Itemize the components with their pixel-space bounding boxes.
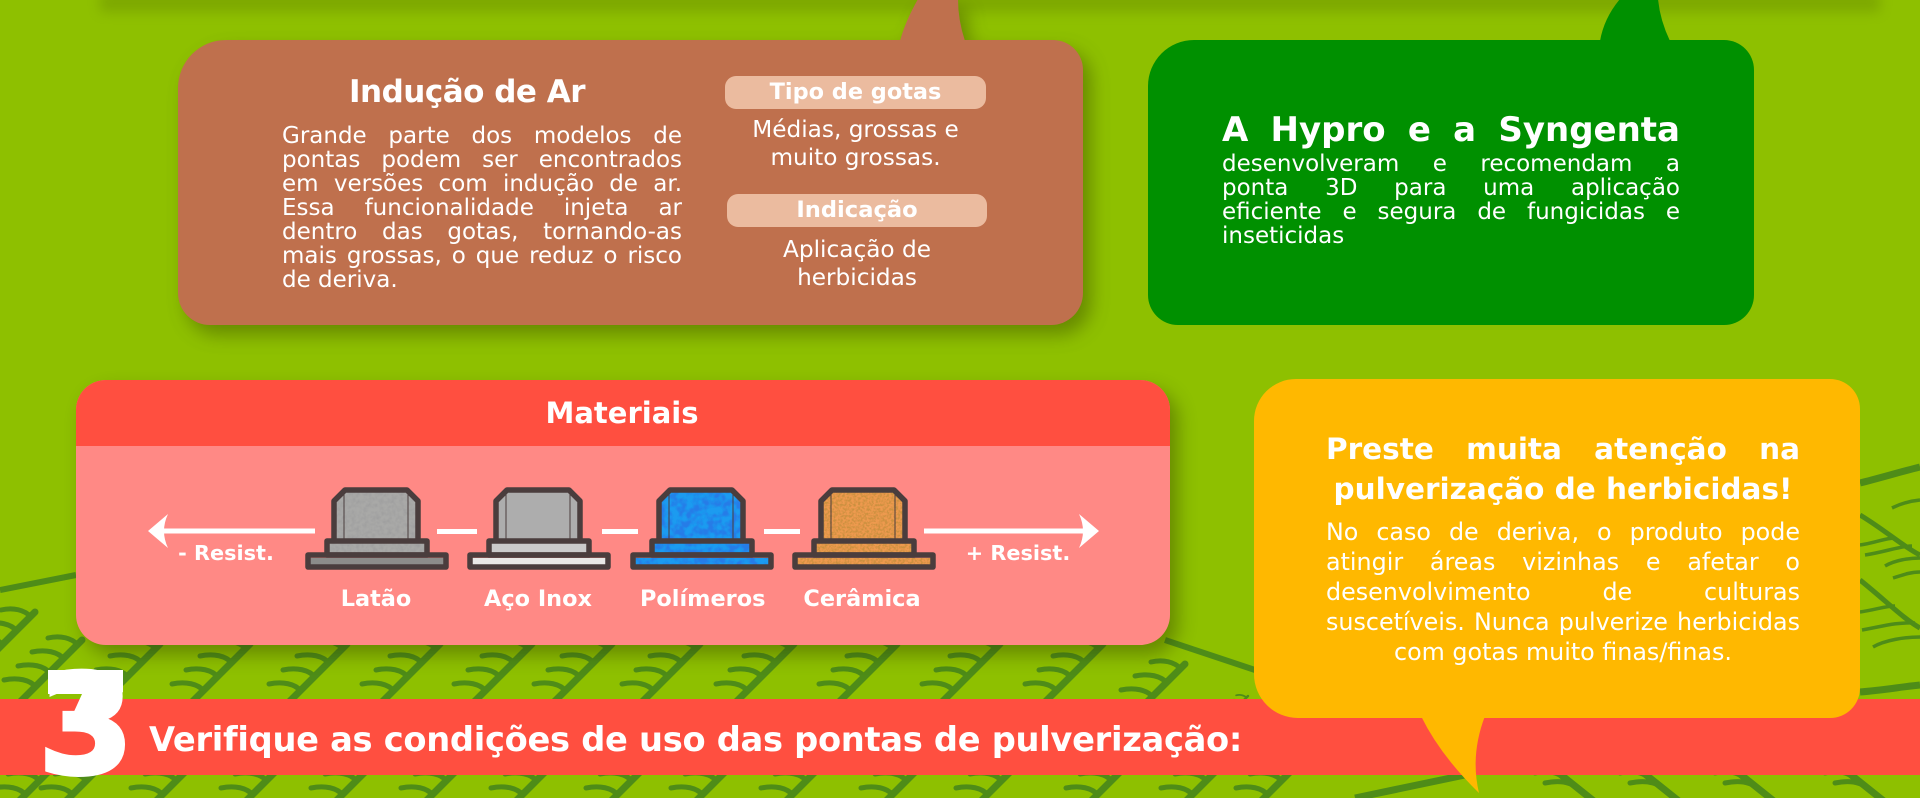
body text: Essa funcionalidade injeta ar bbox=[282, 195, 682, 221]
body text: com gotas muito finas/finas. bbox=[1394, 638, 1732, 666]
green bubble body bbox=[1148, 40, 1754, 325]
heading: pulverização de herbicidas! bbox=[1334, 472, 1792, 506]
panel: hypro e syngenta bbox=[1148, 0, 1754, 325]
text: indicação: herbicidas bbox=[797, 264, 917, 291]
body text: dentro das gotas, tornando-as bbox=[282, 219, 682, 245]
body text: de deriva. bbox=[282, 267, 398, 293]
body text: desenvolvimento de culturas bbox=[1326, 578, 1800, 606]
body text: pontas podem ser encontrados bbox=[282, 147, 682, 173]
arrow: less resistance bbox=[148, 514, 315, 548]
icon: polímeros nozzle bbox=[633, 490, 771, 567]
body text bbox=[1222, 151, 1680, 249]
body text: em versões com indução de ar. bbox=[282, 171, 682, 197]
body text: Grande parte dos modelos de bbox=[282, 123, 682, 149]
heading bbox=[1326, 432, 1800, 506]
label: more resistance: + Resist. bbox=[966, 541, 1070, 565]
body text: mais grossas, o que reduz o risco bbox=[282, 243, 682, 269]
body text: desenvolveram e recomendam a bbox=[1222, 151, 1680, 177]
body text: No caso de deriva, o produto pode bbox=[1326, 518, 1800, 546]
speech bubble tail bbox=[1600, 0, 1670, 40]
text: tipos de gotas: muito grossas. bbox=[770, 144, 941, 171]
yellow bubble body bbox=[1254, 379, 1860, 718]
body text: atingir áreas vizinhas e afetar o bbox=[1326, 548, 1800, 576]
pill: indicação: Indicação bbox=[796, 197, 918, 223]
icon: cerâmica nozzle bbox=[795, 490, 933, 567]
label: aço inox: Aço Inox bbox=[484, 586, 592, 612]
speech bubble tail bbox=[900, 0, 978, 40]
text: tipos de gotas bbox=[752, 116, 959, 171]
label: polímeros: Polímeros bbox=[640, 586, 765, 612]
arrow: more resistance bbox=[924, 514, 1099, 548]
label: less resistance: - Resist. bbox=[178, 541, 274, 565]
body text: inseticidas bbox=[1222, 223, 1344, 249]
panel: atenção herbicidas bbox=[1254, 379, 1860, 793]
text: indicação bbox=[783, 236, 931, 291]
heading: A Hypro e a Syngenta bbox=[1222, 110, 1680, 150]
body text bbox=[1326, 518, 1800, 666]
panel: materiais bbox=[76, 380, 1170, 645]
brown bubble body bbox=[178, 40, 1083, 325]
header band bbox=[76, 380, 1170, 446]
body text: eficiente e segura de fungicidas e bbox=[1222, 199, 1680, 225]
heading: Preste muita atenção na bbox=[1326, 432, 1800, 466]
heading: Indução de Ar bbox=[349, 74, 585, 110]
text: indicação: Aplicação de bbox=[783, 236, 931, 263]
connector dashes bbox=[437, 529, 800, 534]
body text: ponta 3D para uma aplicação bbox=[1222, 175, 1680, 201]
body text bbox=[282, 123, 682, 293]
text: tipos de gotas: Médias, grossas e bbox=[752, 116, 959, 143]
icon: aço inox nozzle bbox=[470, 490, 608, 567]
section heading: Verifique as condições de uso das pontas de pulverização: bbox=[149, 720, 1242, 759]
icon: latão nozzle bbox=[308, 490, 446, 567]
speech bubble tail bbox=[1422, 718, 1484, 793]
pill: tipo de gotas bbox=[725, 76, 986, 109]
pill: tipo de gotas: Tipo de gotas bbox=[770, 79, 941, 105]
label: cerâmica: Cerâmica bbox=[803, 586, 921, 612]
banner: section 3 heading band bbox=[0, 699, 1920, 775]
pill: indicação bbox=[727, 194, 987, 227]
panel: indução de ar bbox=[177, 0, 1100, 344]
body text: suscetíveis. Nunca pulverize herbicidas bbox=[1326, 608, 1800, 636]
label: latão: Latão bbox=[341, 586, 411, 612]
heading: Materiais bbox=[546, 396, 698, 430]
